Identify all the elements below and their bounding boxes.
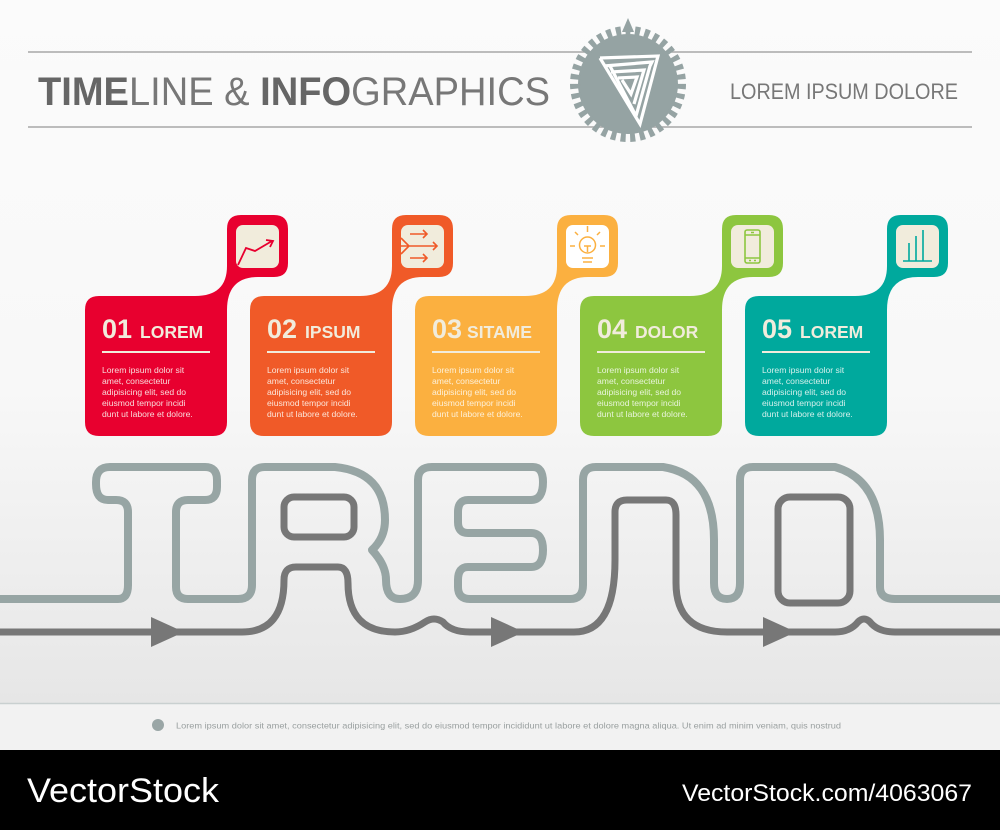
icon: bulb <box>566 225 609 268</box>
footer text: Lorem ipsum dolor sit amet, consectetur adipisicing elit, sed do eiusmod tempor incididunt ut labore et dolore magna aliqua. Ut enim ad minim veniam, quis nostrud <box>176 720 841 730</box>
icon: arrows <box>401 225 444 268</box>
arrow 1 <box>151 617 184 647</box>
card 1: dunt ut labore et dolore. <box>102 409 193 419</box>
card 4: Lorem ipsum dolor sit <box>597 365 680 375</box>
card 5: dunt ut labore et dolore. <box>762 409 853 419</box>
card 1 <box>85 215 288 436</box>
watermark bar: VectorStock <box>27 772 220 810</box>
card 4: dunt ut labore et dolore. <box>597 409 688 419</box>
card 5 <box>745 215 948 436</box>
card 3: 03 SITAME <box>432 314 532 344</box>
arrow 2 <box>491 617 524 647</box>
TREND path <box>0 467 1000 632</box>
card 1: adipisicing elit, sed do <box>102 387 186 397</box>
watermark bar: VectorStock.com/4063067 <box>682 780 972 807</box>
card 3: dunt ut labore et dolore. <box>432 409 523 419</box>
card 3: adipisicing elit, sed do <box>432 387 516 397</box>
card 3: amet, consectetur <box>432 376 500 386</box>
card 2 <box>250 215 453 436</box>
card 1: 01 LOREM <box>102 314 203 344</box>
header lines <box>28 51 972 53</box>
card 5: amet, consectetur <box>762 376 830 386</box>
card 1: eiusmod tempor incidi <box>102 398 186 408</box>
card 1: amet, consectetur <box>102 376 170 386</box>
logo <box>575 18 681 137</box>
card 2: eiusmod tempor incidi <box>267 398 351 408</box>
card 1: Lorem ipsum dolor sit <box>102 365 185 375</box>
icon: phone <box>731 225 774 268</box>
footer band <box>0 703 1000 750</box>
card 2: amet, consectetur <box>267 376 335 386</box>
arrow 3 <box>763 617 796 647</box>
card 5: 05 LOREM <box>762 314 863 344</box>
card 4 <box>580 215 783 436</box>
card 5: adipisicing elit, sed do <box>762 387 846 397</box>
watermark bar <box>0 750 1000 830</box>
card 2: Lorem ipsum dolor sit <box>267 365 350 375</box>
card 3: eiusmod tempor incidi <box>432 398 516 408</box>
card 4: 04 DOLOR <box>597 314 699 344</box>
footer dot <box>152 719 164 731</box>
icon: chart arrow <box>236 225 279 268</box>
card 4: amet, consectetur <box>597 376 665 386</box>
subtitle: LOREM IPSUM DOLORE <box>730 79 958 104</box>
card 5: eiusmod tempor incidi <box>762 398 846 408</box>
card 5: Lorem ipsum dolor sit <box>762 365 845 375</box>
card 2: dunt ut labore et dolore. <box>267 409 358 419</box>
card 4: adipisicing elit, sed do <box>597 387 681 397</box>
card 3 <box>415 215 618 436</box>
card 2: adipisicing elit, sed do <box>267 387 351 397</box>
card 2: 02 IPSUM <box>267 314 360 344</box>
icon: bar chart <box>896 225 939 268</box>
card 3: Lorem ipsum dolor sit <box>432 365 515 375</box>
title: TIMELINE & INFOGRAPHICS <box>38 70 550 114</box>
card 4: eiusmod tempor incidi <box>597 398 681 408</box>
